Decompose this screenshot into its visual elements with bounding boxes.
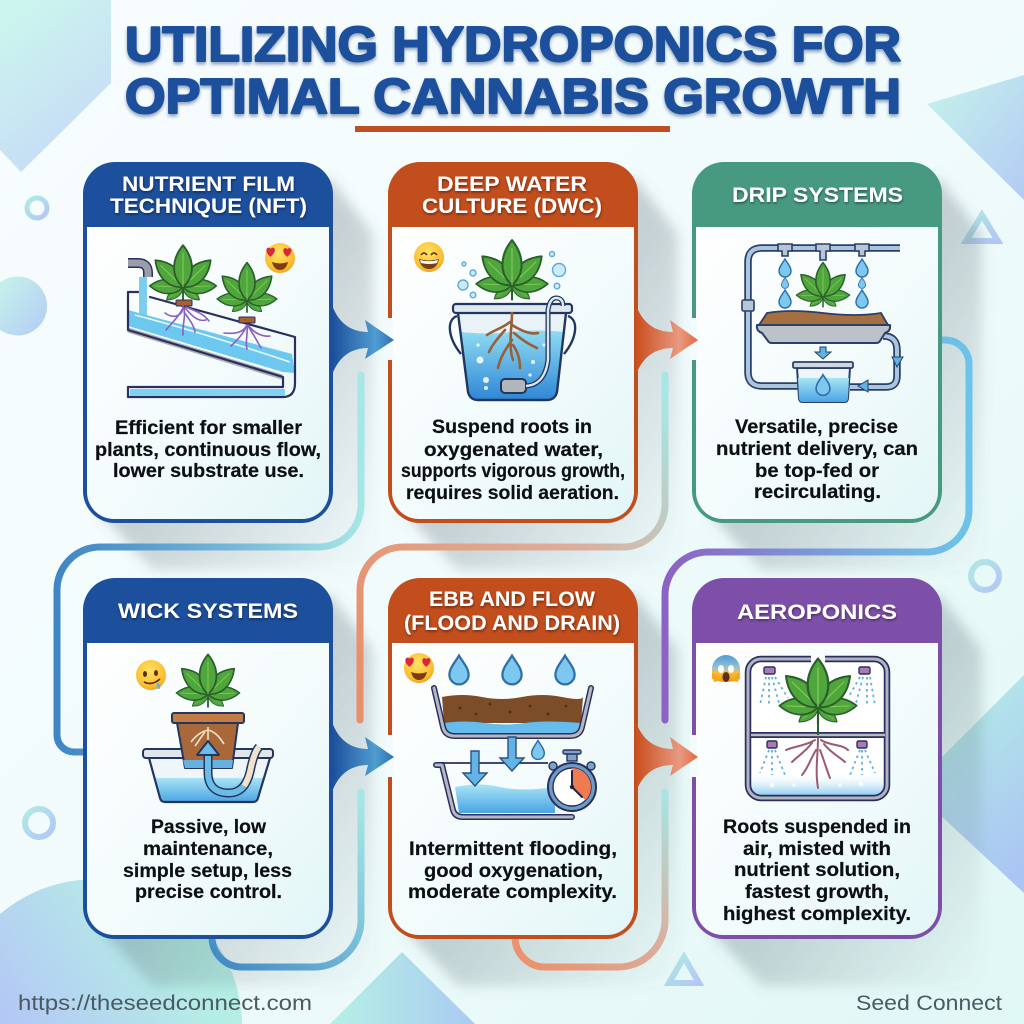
connector: ebb bottom loop: [515, 792, 665, 967]
text: DWC description: Suspend roots in: [432, 417, 592, 438]
text: DWC description: requires solid aeration.: [406, 483, 619, 504]
arrow: DWC to drip: [636, 305, 698, 375]
heading: DWC: CULTURE (DWC): [422, 195, 602, 218]
connector: drip to aeroponics: [665, 340, 969, 720]
background shape: ring lower left: [25, 809, 53, 837]
text: aeroponics description: fastest growth,: [745, 882, 889, 903]
icon: wick pot over reservoir: [143, 654, 273, 802]
heading: ebb and flow: [404, 588, 620, 635]
heading: aeroponics: AEROPONICS: [737, 601, 897, 624]
icon: bucket with plant and air stone: [450, 240, 575, 400]
background shape: ring right: [971, 562, 999, 590]
panel: wick systems: [83, 578, 333, 939]
background shape: left circle: [0, 276, 47, 336]
text: NFT description: plants, continuous flow,: [95, 440, 321, 461]
panel: deep water culture: [388, 162, 638, 523]
heading: ebb and flow: EBB AND FLOW: [429, 588, 595, 611]
title: UTILIZING HYDROPONICS FOR: [125, 18, 901, 72]
text: wick description: [123, 817, 292, 903]
background shape: outline triangle top right: [966, 215, 998, 241]
heading: NFT: NUTRIENT FILM: [122, 173, 295, 196]
text: DWC description: [401, 417, 625, 504]
text: ebb and flow description: moderate complexity.: [408, 882, 617, 903]
title: OPTIMAL CANNABIS GROWTH: [125, 70, 901, 124]
text: aeroponics description: [723, 817, 911, 925]
panel: aeroponics: [692, 578, 942, 939]
text: drip description: recirculating.: [754, 482, 881, 503]
icon: aeroponic chamber: [748, 653, 887, 798]
text: wick description: maintenance,: [143, 839, 273, 860]
title underline: [355, 126, 670, 132]
panel: nutrient film technique: [83, 162, 333, 523]
title: [125, 18, 901, 124]
connector: wick bottom loop: [212, 792, 361, 967]
text: wick description: Passive, low: [151, 817, 266, 838]
icon: NFT channel with plants: [128, 245, 295, 397]
background shape: small ring upper left: [27, 198, 47, 218]
background shape: bottom triangle: [330, 952, 475, 1024]
text: drip description: Versatile, precise: [735, 417, 898, 438]
heading: drip: DRIP SYSTEMS: [732, 184, 903, 207]
emoji: heart eyes: [404, 653, 434, 683]
text: NFT description: Efficient for smaller: [115, 418, 303, 439]
emoji: drooling: [136, 660, 166, 690]
heading: ebb and flow: (FLOOD AND DRAIN): [404, 612, 620, 635]
text: NFT description: lower substrate use.: [113, 461, 304, 482]
text: DWC description: supports vigorous growth,: [401, 461, 625, 482]
heading: DWC: [422, 173, 602, 218]
text: DWC description: oxygenated water,: [424, 440, 603, 461]
panel: ebb and flow: [388, 578, 638, 939]
background shape: top-left polygon: [0, 0, 111, 172]
text: drip description: nutrient delivery, can: [716, 439, 918, 460]
arrow: ebb and flow to aeroponics: [636, 722, 698, 792]
text: NFT description: [95, 418, 321, 482]
emoji: screaming face: [712, 655, 740, 682]
background shape: right polygon: [911, 675, 1024, 893]
text: wick description: precise control.: [135, 882, 282, 903]
heading: NFT: [110, 173, 307, 218]
footer: brand: Seed Connect: [856, 992, 1002, 1015]
panel: drip systems: [692, 162, 942, 523]
footer: url: https://theseedconnect.com: [18, 992, 312, 1015]
arrow: NFT to DWC: [332, 305, 394, 375]
heading: wick: WICK SYSTEMS: [118, 600, 298, 623]
text: drip description: [716, 417, 918, 503]
connector: DWC to ebb and flow: [360, 375, 665, 720]
emoji: heart eyes: [265, 243, 295, 273]
heading: DWC: DEEP WATER: [437, 173, 587, 196]
text: ebb and flow description: [408, 839, 617, 903]
text: ebb and flow description: Intermittent flooding,: [409, 839, 617, 860]
text: drip description: be top-fed or: [755, 461, 880, 482]
background shape: bottom-left blob: [0, 879, 242, 1024]
background shape: outline triangle bottom: [669, 957, 699, 983]
background shape: top-right polygon: [927, 75, 1024, 200]
text: aeroponics description: highest complexity.: [723, 904, 911, 925]
text: ebb and flow description: good oxygenation,: [424, 861, 603, 882]
text: wick description: simple setup, less: [123, 861, 292, 882]
arrow: wick to ebb and flow: [332, 722, 394, 792]
text: aeroponics description: Roots suspended in: [723, 817, 911, 838]
icon: drip irrigation loop: [742, 244, 903, 402]
heading: NFT: TECHNIQUE (NFT): [110, 195, 307, 218]
text: aeroponics description: nutrient solution,: [734, 860, 900, 881]
card shadows: [101, 176, 982, 986]
text: aeroponics description: air, misted with: [743, 839, 891, 860]
connector: NFT row to wick: [57, 375, 361, 752]
icon: flood trays and timer: [434, 656, 596, 817]
emoji: grin: [414, 242, 444, 272]
card border notches: [386, 318, 697, 777]
